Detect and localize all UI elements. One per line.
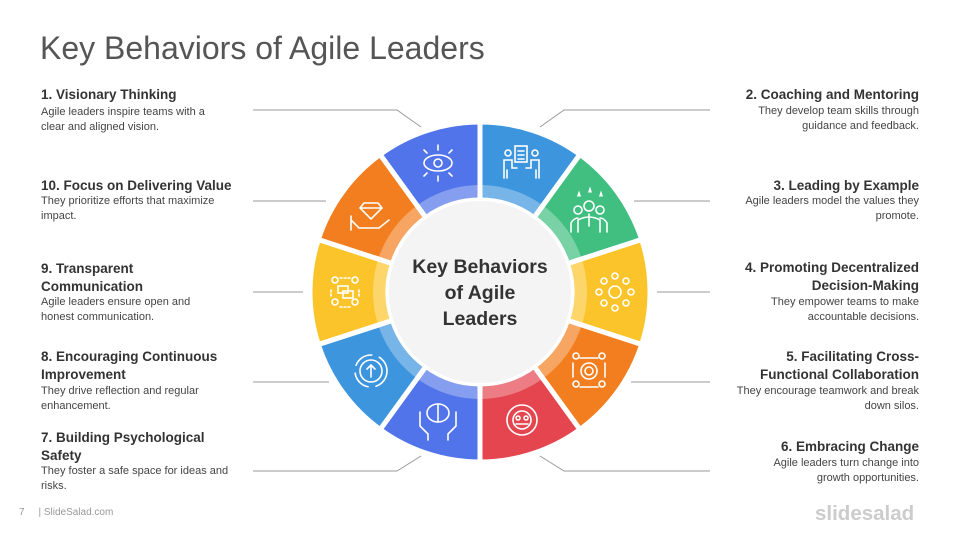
text: item 1: Agile leaders inspire teams with a clear and aligned vision. xyxy=(41,106,205,132)
text: item 4: They empower teams to make accountable decisions. xyxy=(771,296,919,322)
text: item 2: 2. Coaching and Mentoring xyxy=(746,87,919,102)
icon: communication xyxy=(331,277,359,307)
text: item 9: 9. Transparent Communication xyxy=(41,261,143,294)
text: item 4 xyxy=(745,260,919,322)
text: item 1: 1. Visionary Thinking xyxy=(41,87,177,102)
text: item 6: Agile leaders turn change into growth opportunities. xyxy=(773,457,919,484)
text: item 6: 6. Embracing Change xyxy=(781,439,919,454)
text: item 2 xyxy=(746,87,919,132)
text: item 3: Agile leaders model the values they promote. xyxy=(745,195,919,222)
text: item 9: Agile leaders ensure open and honest communication. xyxy=(41,296,190,322)
text: item 5 xyxy=(737,349,919,412)
text: item 6 xyxy=(773,439,919,484)
logo: slidesalad xyxy=(815,502,914,525)
title: Key Behaviors of Agile Leaders xyxy=(40,30,485,66)
text: item 3: 3. Leading by Example xyxy=(773,178,919,193)
footer: 7 | SlideSalad.com xyxy=(19,507,113,518)
icon: improvement gear xyxy=(355,355,387,387)
text: item 10: 10. Focus on Delivering Value xyxy=(41,178,232,193)
text: item 7: They foster a safe space for ideas and risks. xyxy=(41,465,228,492)
center label: Key Behaviors xyxy=(412,256,548,278)
text: item 8 xyxy=(41,349,217,412)
icon: value diamond xyxy=(351,203,389,230)
text: item 2: They develop team skills through guidance and feedback. xyxy=(758,105,919,132)
text: item 4: 4. Promoting Decentralized Decision-Making xyxy=(745,260,919,293)
text: item 5: 5. Facilitating Cross-Functional Collaboration xyxy=(760,349,919,382)
icon: eye xyxy=(424,145,452,181)
icon: change gear xyxy=(507,405,537,435)
icon: network xyxy=(596,273,634,311)
text: item 10 xyxy=(41,178,232,222)
text: item 3 xyxy=(745,178,919,222)
text: item 8: 8. Encouraging Continuous Improvement xyxy=(41,349,217,382)
text: item 7 xyxy=(41,430,228,492)
icon: brain hands xyxy=(420,404,456,440)
text: item 1 xyxy=(41,87,205,132)
text: item 8: They drive reflection and regular enhancement. xyxy=(41,385,199,412)
wheel diagram: Leaders xyxy=(443,308,518,330)
text: item 7: 7. Building Psychological Safety xyxy=(41,430,205,463)
icon: cross-functional xyxy=(573,353,605,387)
wheel diagram: of Agile xyxy=(445,282,516,304)
icon: coaching xyxy=(504,146,539,178)
text: item 9 xyxy=(41,261,190,322)
text: item 5: They encourage teamwork and break down silos. xyxy=(737,385,919,412)
icon: team stars xyxy=(571,189,607,232)
text: item 10: They prioritize efforts that maximize impact. xyxy=(41,195,214,222)
